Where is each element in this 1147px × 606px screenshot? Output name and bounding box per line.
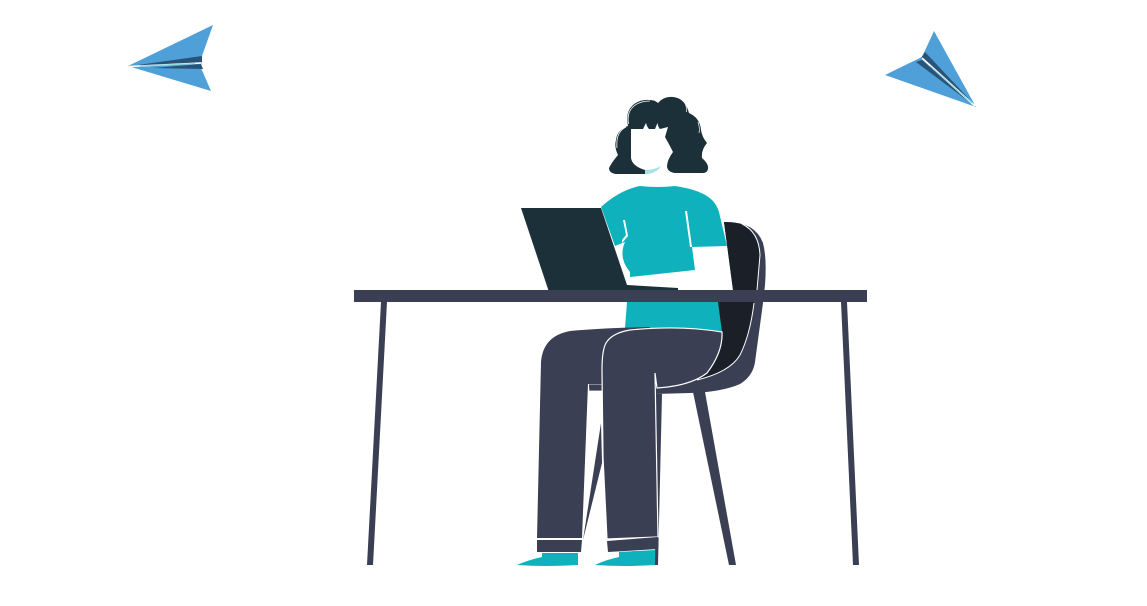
shirt upper bbox=[601, 186, 727, 277]
far trouser cuff bbox=[537, 540, 582, 552]
far leg bbox=[537, 327, 650, 552]
laptop bbox=[521, 208, 678, 292]
near shoe bbox=[595, 550, 655, 566]
chair seat and back shell bbox=[655, 222, 766, 394]
chair centre leg bbox=[655, 394, 662, 565]
chair rear leg bbox=[583, 423, 602, 540]
neck shadow bbox=[645, 166, 661, 174]
chair back inner panel bbox=[697, 222, 760, 380]
near trouser cuff bbox=[607, 537, 658, 552]
far shoe bbox=[517, 553, 578, 566]
hair bbox=[609, 97, 708, 174]
shirt arm crease bbox=[622, 220, 628, 243]
chair seat stub bbox=[588, 384, 603, 391]
shirt lower bbox=[625, 302, 722, 332]
chair front leg bbox=[693, 392, 736, 565]
icon: left paper plane bbox=[128, 25, 213, 91]
icon: right paper plane bbox=[885, 31, 976, 107]
chair bbox=[583, 222, 766, 565]
table top bbox=[354, 290, 867, 302]
shirt sleeve crease bbox=[685, 211, 692, 247]
near leg bbox=[602, 328, 722, 552]
table legs bbox=[367, 302, 859, 565]
